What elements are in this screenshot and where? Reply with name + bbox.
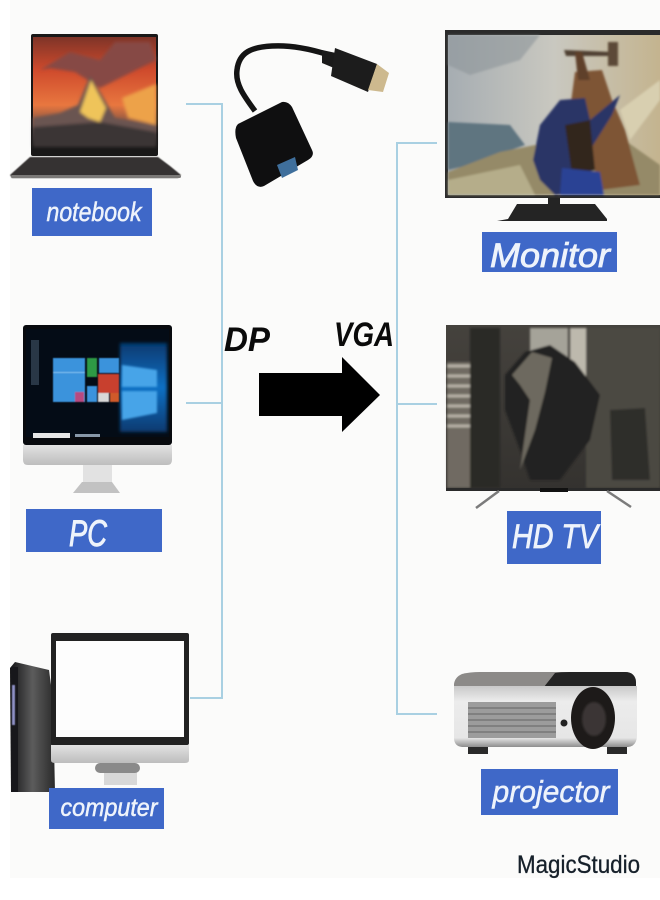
tower [10, 662, 55, 792]
device: desktop computer [10, 633, 189, 792]
device: notebook laptop [10, 34, 181, 178]
watermark: MagicStudio: MagicStudio [517, 851, 640, 879]
label: projector [481, 769, 618, 815]
label: PC: PC [69, 513, 107, 554]
device: HD TV [446, 325, 660, 508]
label: DP: DP [224, 321, 270, 359]
label: Monitor: Monitor [490, 237, 612, 275]
label: notebook: notebook [46, 197, 143, 227]
label: PC [26, 509, 162, 554]
label: HD TV: HD TV [512, 518, 601, 556]
label: computer [49, 788, 164, 829]
label: projector: projector [492, 774, 611, 809]
label: VGA: VGA [334, 316, 394, 354]
label: HD TV [507, 511, 601, 564]
label: notebook [32, 188, 152, 236]
device: PC all-in-one [23, 325, 172, 493]
connector lines: sources [186, 104, 222, 698]
device: monitor [445, 30, 660, 221]
connector lines: displays [397, 143, 437, 714]
label: computer: computer [60, 794, 159, 822]
arrow: DP to VGA [259, 357, 380, 432]
device: projector [454, 672, 637, 754]
monitor [51, 633, 189, 785]
adapter: DP to VGA cable [235, 46, 389, 187]
